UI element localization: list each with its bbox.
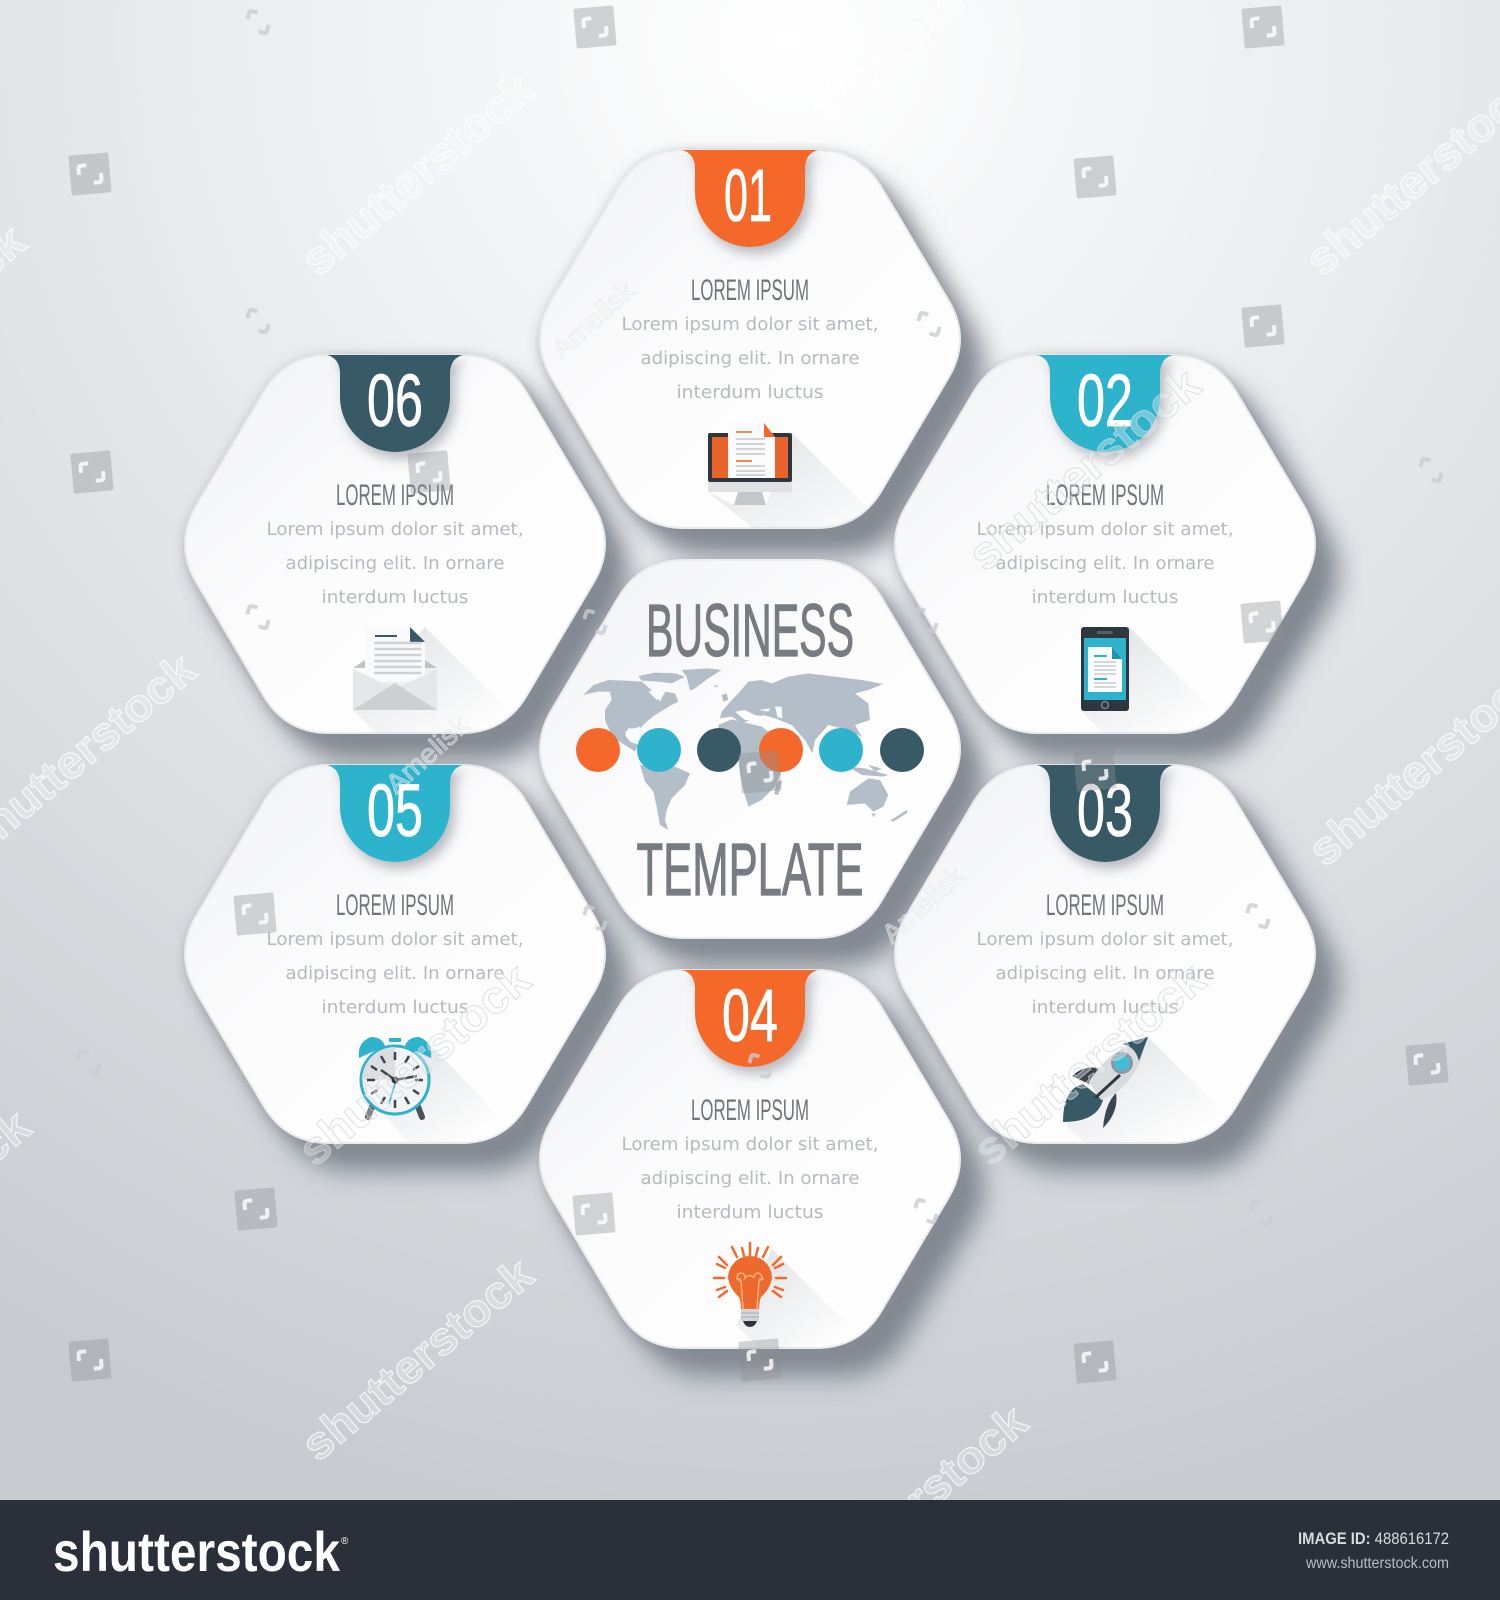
text: 02: Lorem ipsum dolor sit amet, bbox=[976, 519, 1234, 540]
text: 02: interdum luctus bbox=[1032, 587, 1178, 608]
heading: 06: LOREM IPSUM bbox=[336, 479, 454, 512]
text: 05: Lorem ipsum dolor sit amet, bbox=[266, 929, 524, 950]
footer image id: IMAGE ID: 488616172 bbox=[1298, 1529, 1449, 1548]
number: 04: 04 bbox=[722, 974, 778, 1057]
watermarks: shutterstock bbox=[291, 1247, 543, 1471]
long shadow: 02 bbox=[1081, 627, 1184, 732]
text: 01: interdum luctus bbox=[676, 382, 824, 403]
panel: step 06 bbox=[185, 355, 605, 742]
watermarks: shutterstock bbox=[288, 952, 540, 1176]
text: 06: adipiscing elit. In ornare bbox=[286, 553, 504, 574]
watermarks: Amelisk bbox=[380, 710, 475, 799]
title: business: BUSINESS bbox=[646, 589, 854, 672]
text: 04: Lorem ipsum dolor sit amet, bbox=[622, 1134, 878, 1155]
watermarks: shutterstock bbox=[958, 357, 1210, 581]
text: 06: interdum luctus bbox=[322, 587, 468, 608]
panel: step 03 bbox=[895, 765, 1315, 1144]
text: 03: interdum luctus bbox=[1032, 997, 1178, 1018]
heading: 01: LOREM IPSUM bbox=[691, 274, 809, 307]
watermarks: shutterstock bbox=[291, 62, 543, 286]
number: 01: 01 bbox=[724, 154, 772, 237]
icon: monitor with document bbox=[708, 423, 792, 505]
number: 05: 05 bbox=[367, 769, 423, 852]
text: 03: adipiscing elit. In ornare bbox=[996, 963, 1214, 984]
long shadow: 06 bbox=[354, 627, 480, 732]
footer logo: ® bbox=[341, 1536, 349, 1547]
text: 05: interdum luctus bbox=[322, 997, 468, 1018]
hexagon shadows bbox=[187, 154, 1339, 1376]
long shadow: 04 bbox=[736, 1249, 826, 1340]
long shadow: 05 bbox=[384, 1044, 476, 1138]
text: 04: interdum luctus bbox=[676, 1202, 824, 1223]
timeline dots bbox=[576, 728, 924, 772]
watermarks: shutterstock bbox=[963, 952, 1215, 1176]
watermarks: Amelisk bbox=[546, 275, 641, 364]
text: 01: Lorem ipsum dolor sit amet, bbox=[622, 314, 878, 335]
icon: light bulb bbox=[714, 1243, 786, 1327]
long shadow: 03 bbox=[1064, 1037, 1196, 1142]
long shadow: 01 bbox=[709, 433, 856, 528]
panel: step 05 bbox=[185, 765, 605, 1144]
heading: 05: LOREM IPSUM bbox=[336, 889, 454, 922]
text: 05: adipiscing elit. In ornare bbox=[286, 963, 504, 984]
number: 02: 02 bbox=[1077, 359, 1133, 442]
text: 03: Lorem ipsum dolor sit amet, bbox=[976, 929, 1234, 950]
badge: 02 bbox=[1037, 355, 1173, 452]
number: 03: 03 bbox=[1077, 769, 1133, 852]
heading: 02: LOREM IPSUM bbox=[1046, 479, 1164, 512]
badge: 06 bbox=[327, 355, 463, 452]
icon: alarm clock bbox=[359, 1037, 431, 1117]
watermarks: Amelisk bbox=[876, 860, 971, 949]
panel: step 01 bbox=[540, 150, 960, 566]
icon: rocket bbox=[1063, 1037, 1148, 1128]
text: 02: adipiscing elit. In ornare bbox=[996, 553, 1214, 574]
footer bar bbox=[0, 1500, 1500, 1600]
icon: smartphone bbox=[1081, 627, 1129, 711]
text: 06: Lorem ipsum dolor sit amet, bbox=[266, 519, 524, 540]
heading: 03: LOREM IPSUM bbox=[1046, 889, 1164, 922]
panel: step 02 bbox=[895, 355, 1315, 738]
panel: center business template bbox=[540, 560, 960, 938]
world map bbox=[583, 668, 908, 830]
heading: 04: LOREM IPSUM bbox=[691, 1094, 809, 1127]
icon: open envelope bbox=[353, 627, 437, 710]
panel: step 04 bbox=[540, 970, 960, 1355]
badge: 03 bbox=[1037, 765, 1173, 862]
footer url: www.shutterstock.com bbox=[1305, 1555, 1449, 1572]
badge: 04 bbox=[682, 970, 818, 1067]
title: template: TEMPLATE bbox=[636, 828, 864, 911]
footer logo: shutterstock bbox=[53, 1520, 341, 1583]
badge: 01 bbox=[682, 150, 818, 247]
text: 04: adipiscing elit. In ornare bbox=[640, 1168, 860, 1189]
number: 06: 06 bbox=[367, 359, 423, 442]
badge: 05 bbox=[327, 765, 463, 862]
text: 01: adipiscing elit. In ornare bbox=[640, 348, 860, 369]
